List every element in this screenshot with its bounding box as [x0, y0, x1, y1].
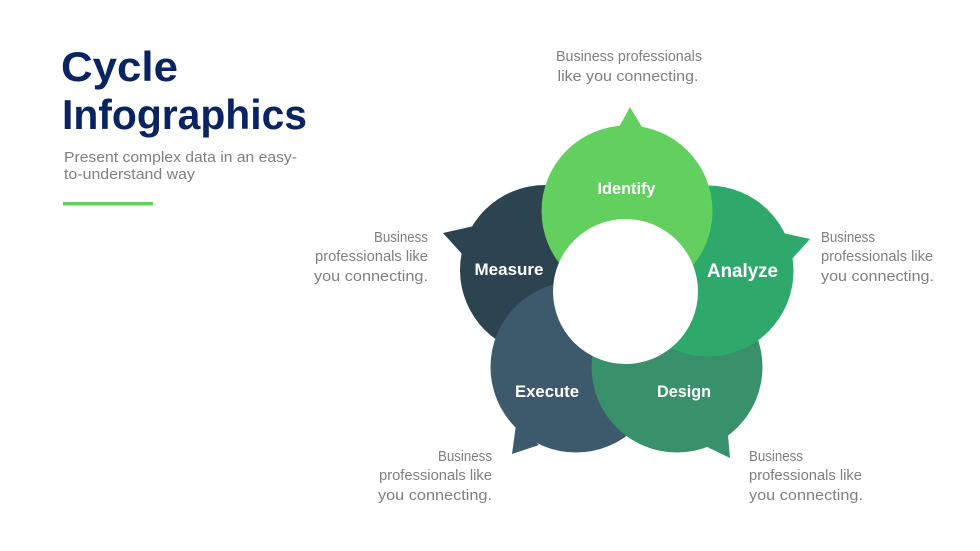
- text block: bottom left: Business: [438, 448, 492, 465]
- text block: bottom right: [749, 448, 863, 504]
- text block: right: professionals like: [821, 248, 933, 265]
- label: Analyze: Analyze: [707, 261, 778, 282]
- label: Identify: Identify: [598, 179, 656, 198]
- center circle: [553, 219, 698, 364]
- text block: right: Business: [821, 229, 875, 246]
- segment: Design: [592, 282, 762, 458]
- text block: top: Business professionals: [556, 48, 702, 65]
- segment: Measure: [443, 185, 630, 355]
- text block: right: [821, 229, 934, 285]
- text block: left: you connecting.: [314, 268, 428, 285]
- cycle diagram: [443, 107, 810, 458]
- text block: bottom left: [378, 448, 492, 504]
- segment: Execute: [490, 282, 662, 454]
- label: Measure: Measure: [474, 260, 544, 279]
- segment: Identify: [542, 107, 712, 296]
- subtitle: [64, 149, 297, 183]
- accent underline: [63, 202, 153, 206]
- text block: left: [314, 229, 428, 285]
- segment: Analyze: [622, 186, 810, 356]
- label: Execute: Execute: [515, 382, 579, 401]
- text block: bottom left: professionals like: [379, 467, 492, 484]
- text block: bottom right: Business: [749, 448, 803, 465]
- text block: bottom right: you connecting.: [749, 487, 863, 504]
- subtitle: to-understand way: [64, 166, 196, 183]
- text block: left: professionals like: [315, 248, 428, 265]
- text block: left: Business: [374, 229, 428, 246]
- title: Infographics: [62, 91, 307, 138]
- text block: right: you connecting.: [821, 268, 934, 285]
- title: Cycle: [61, 43, 178, 90]
- text block: top: like you connecting.: [558, 68, 698, 85]
- label: Design: Design: [657, 382, 711, 401]
- text block: bottom right: professionals like: [749, 467, 862, 484]
- subtitle: Present complex data in an easy-: [64, 149, 297, 166]
- title: [61, 43, 307, 138]
- text block: top: [556, 48, 702, 85]
- text block: bottom left: you connecting.: [378, 487, 492, 504]
